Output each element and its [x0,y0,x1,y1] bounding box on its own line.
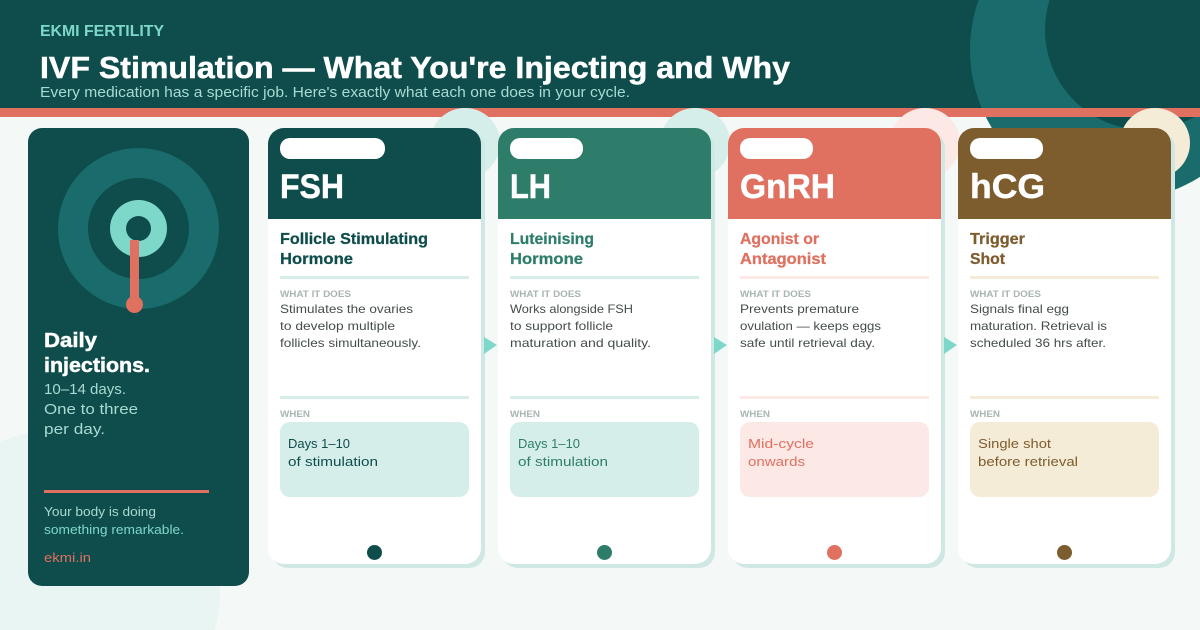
panel: daily injections sidebar [28,128,249,586]
icon: injection target [58,148,219,313]
what it does [970,289,1107,350]
card name: GnRH [740,168,835,206]
what it does: Stimulates the ovaries [280,302,413,316]
what it does: WHAT IT DOES [970,289,1041,299]
card subtitle: Hormone [280,251,353,268]
what it does: safe until retrieval day. [740,336,875,350]
what it does: Prevents premature [740,302,859,316]
sidebar details: One to three [44,401,138,418]
when: Days 1–10 [288,436,350,451]
when: Single shot [978,436,1051,451]
card name: hCG [970,168,1045,206]
when: WHEN [510,409,540,419]
subtitle: Every medication has a specific job. Here's exactly what each one does in your cycle. [40,85,630,101]
panel: GnRH card [728,128,945,568]
when: WHEN [740,409,770,419]
when: WHEN [280,409,310,419]
panel: FSH card [268,128,485,568]
sidebar heading: injections. [44,355,150,377]
what it does: to support follicle [510,319,613,333]
when: of stimulation [288,454,378,469]
when: WHEN [970,409,1000,419]
card subtitle: Shot [970,251,1006,268]
what it does [740,289,881,350]
what it does: maturation. Retrieval is [970,319,1107,333]
what it does: WHAT IT DOES [280,289,351,299]
sidebar note: something remarkable. [44,523,184,537]
panel: LH card [498,128,715,568]
sidebar heading: Daily [44,330,98,352]
when: before retrieval [978,454,1078,469]
panel: hCG card [958,128,1175,568]
when: of stimulation [518,454,608,469]
sidebar note: Your body is doing [44,505,156,519]
when: Mid-cycle [748,436,814,451]
when [280,409,469,497]
what it does [280,289,421,350]
sidebar details: per day. [44,421,105,438]
what it does: Signals final egg [970,302,1069,316]
what it does [510,289,651,350]
card subtitle: Antagonist [740,251,827,268]
card subtitle: Luteinising [510,231,594,248]
when [510,409,699,497]
what it does: WHAT IT DOES [510,289,581,299]
when [740,409,929,497]
when: onwards [748,454,806,469]
card subtitle: Agonist or [740,231,819,248]
website: ekmi.in [44,550,91,565]
what it does: WHAT IT DOES [740,289,811,299]
when: Days 1–10 [518,436,580,451]
card name: LH [510,168,551,206]
when [970,409,1159,497]
what it does: follicles simultaneously. [280,336,421,350]
card name: FSH [280,168,344,206]
arrow: LH to GnRH [714,337,727,354]
title: IVF Stimulation — What You're Injecting and Why [40,50,791,85]
card subtitle: Follicle Stimulating [280,231,428,248]
arrow: FSH to LH [484,337,497,354]
brand label: EKMI FERTILITY [40,23,164,40]
arrow: GnRH to hCG [944,337,957,354]
sidebar details: 10–14 days. [44,381,126,398]
header text [40,23,791,101]
what it does: scheduled 36 hrs after. [970,336,1106,350]
what it does: maturation and quality. [510,336,651,350]
what it does: Works alongside FSH [510,302,633,316]
card subtitle: Trigger [970,231,1025,248]
card subtitle: Hormone [510,251,583,268]
what it does: ovulation — keeps eggs [740,319,881,333]
what it does: to develop multiple [280,319,395,333]
